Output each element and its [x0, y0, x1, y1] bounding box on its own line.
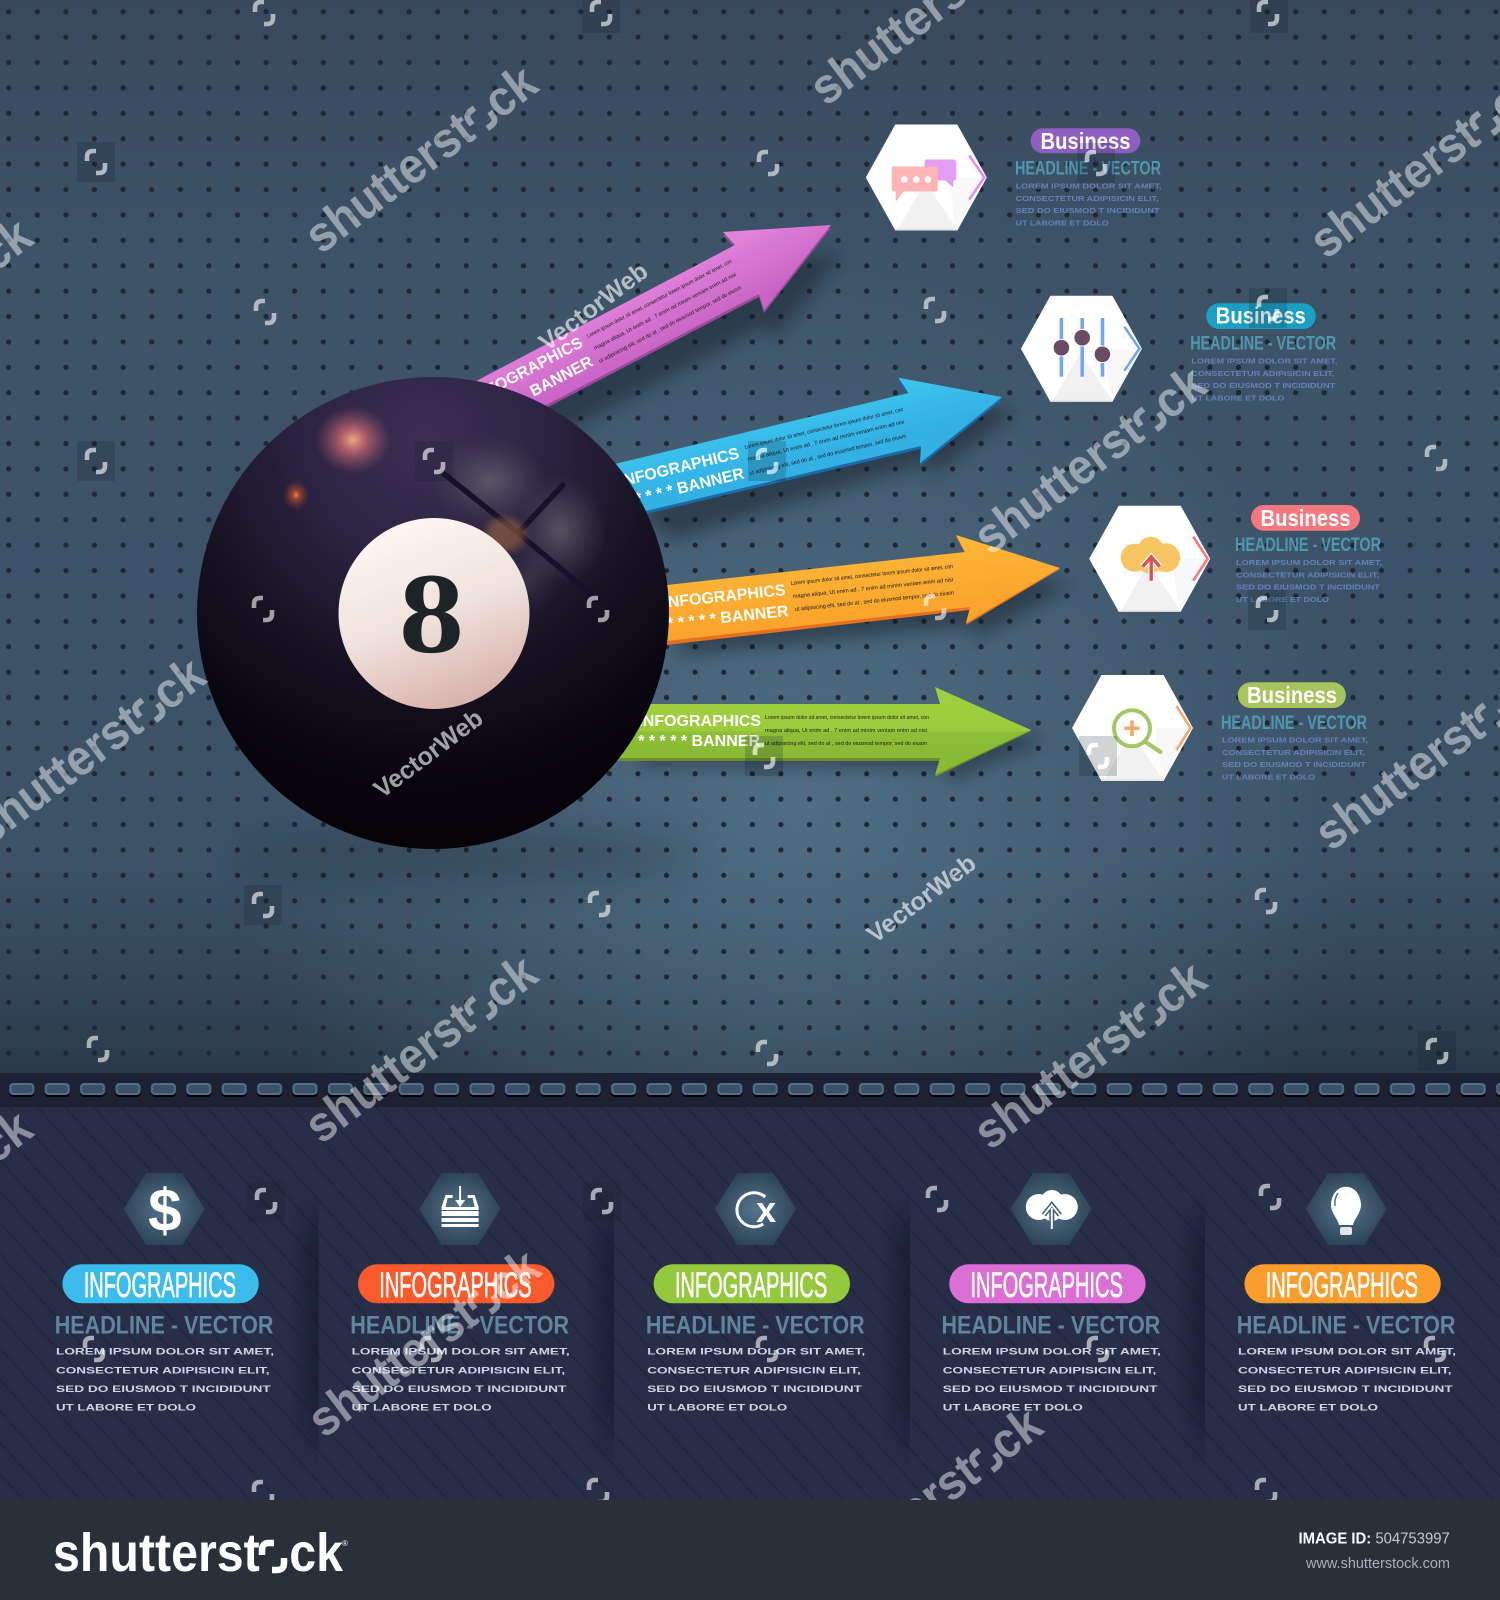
body text: UT LABORE ET DOLO	[943, 1403, 1083, 1413]
body text	[56, 1347, 274, 1413]
arrow: pink	[440, 225, 841, 450]
headline: HEADLINE - VECTOR	[55, 1312, 274, 1340]
arrow: green: * * * * * BANNER	[638, 733, 760, 750]
watermarks: VectorWeb	[369, 257, 981, 949]
arrow: orange: ut adipisicing elit, sed do at , sed do eiusmod tempor, sed do eiusm	[795, 590, 955, 613]
body text: UT LABORE ET DOLO	[352, 1403, 492, 1413]
pill	[1244, 1264, 1441, 1305]
hexagon icon: dollar: $	[148, 1177, 181, 1244]
text block 4: Business	[1247, 682, 1337, 708]
hexagon 3: cloud upload	[1089, 506, 1210, 612]
body text: UT LABORE ET DOLO	[1238, 1403, 1378, 1413]
eight ball	[197, 377, 669, 849]
body text: CONSECTETUR ADIPISICIN ELIT,	[352, 1365, 565, 1375]
text block 4	[1221, 682, 1368, 782]
image id: IMAGE ID: 504753997	[1298, 1530, 1450, 1548]
text block 3: SED DO EIUSMOD T INCIDIDUNT	[1236, 585, 1381, 592]
body text	[647, 1347, 865, 1413]
body text: LOREM IPSUM DOLOR SIT AMET,	[1238, 1347, 1456, 1357]
text block 3: CONSECTETUR ADIPISICIN ELIT,	[1236, 572, 1379, 579]
column 2: inbox	[350, 1173, 570, 1413]
website: www.shutterstock.com	[1305, 1556, 1450, 1572]
column 1: dollar	[55, 1173, 274, 1413]
arrow: blue: * * * * * BANNER	[624, 465, 746, 510]
text block 2: CONSECTETUR ADIPISICIN ELIT,	[1191, 371, 1334, 378]
body text: LOREM IPSUM DOLOR SIT AMET,	[352, 1347, 570, 1357]
text block 2: UT LABORE ET DOLO	[1191, 396, 1285, 402]
text block 3	[1235, 505, 1382, 604]
headline: HEADLINE - VECTOR	[350, 1312, 569, 1340]
arrow: green: Lorem ipsum dolor sit amet, consectetur lorem ipsum dolor sit amet, con	[765, 715, 929, 721]
text block 1: LOREM IPSUM DOLOR SIT AMET,	[1016, 184, 1162, 190]
hexagon icon: circle x: x	[756, 1189, 776, 1230]
icon: purple speech bubble	[922, 160, 956, 188]
arrow: green	[600, 687, 1046, 782]
watermarks: stock wordmarks: shutterstock	[294, 943, 547, 1154]
lower panel with diagonal stripes	[0, 1107, 1500, 1500]
body text: CONSECTETUR ADIPISICIN ELIT,	[56, 1365, 270, 1375]
arrow: green: ut adipisicing elit, sed do at , sed do eiusmod tempor, sed do eiusm	[765, 741, 927, 747]
arrow: green: INFOGRAPHICS	[638, 713, 761, 730]
arrow: blue: magna aliqua, Ut enim ad . 7 enim ad minim veniam enim ad nisi	[747, 420, 905, 463]
arrow: orange: magna aliqua, Ut enim ad . 7 enim ad minim veniam enim ad nisi	[793, 577, 953, 600]
arrow: blue: Lorem ipsum dolor sit amet, consectetur lorem ipsum dolor sit amet, con	[744, 407, 904, 451]
body text: SED DO EIUSMOD T INCIDIDUNT	[352, 1384, 567, 1394]
icon: magnifier	[1114, 710, 1160, 752]
text block 2	[1190, 302, 1337, 402]
body text: LOREM IPSUM DOLOR SIT AMET,	[943, 1347, 1161, 1357]
arrow: pink: INFOGRAPHICS	[469, 334, 586, 407]
pill: INFOGRAPHICS	[675, 1266, 827, 1305]
headline: HEADLINE - VECTOR	[646, 1312, 865, 1340]
icon: up arrow	[1143, 557, 1160, 581]
text block 4: SED DO EIUSMOD T INCIDIDUNT	[1222, 762, 1367, 769]
body text: CONSECTETUR ADIPISICIN ELIT,	[1238, 1365, 1452, 1375]
body text: SED DO EIUSMOD T INCIDIDUNT	[56, 1384, 271, 1394]
column 3: refresh x	[646, 1173, 865, 1413]
hexagon 4: magnifier	[1072, 675, 1193, 781]
body text: UT LABORE ET DOLO	[56, 1403, 196, 1413]
pill	[62, 1264, 259, 1305]
arrow: orange	[640, 535, 1070, 655]
headline: HEADLINE - VECTOR	[941, 1312, 1160, 1340]
icon: pink speech bubble	[892, 166, 938, 202]
ball flare: small	[283, 480, 309, 510]
hexagon icon: circle x	[715, 1173, 796, 1245]
arrow: orange: Lorem ipsum dolor sit amet, consectetur lorem ipsum dolor sit amet, con	[791, 564, 953, 587]
text block 1	[1015, 128, 1162, 228]
text block 2: SED DO EIUSMOD T INCIDIDUNT	[1191, 383, 1336, 390]
body text	[1238, 1347, 1456, 1413]
ball shadow	[240, 829, 700, 881]
icon: sliders	[1053, 318, 1111, 377]
arrow: orange: INFOGRAPHICS	[663, 582, 787, 612]
arrow: pink: BANNER	[527, 353, 596, 400]
text block 3: LOREM IPSUM DOLOR SIT AMET,	[1236, 560, 1382, 567]
pill	[654, 1264, 850, 1305]
icon: chevron	[1124, 327, 1139, 371]
pill: INFOGRAPHICS	[84, 1266, 236, 1305]
text block 2: Business	[1216, 302, 1306, 328]
watermarks: stock wordmarks: shutterstock	[294, 53, 547, 264]
body text: SED DO EIUSMOD T INCIDIDUNT	[943, 1384, 1158, 1394]
pill: INFOGRAPHICS	[379, 1266, 532, 1305]
text block 3: Business	[1260, 505, 1350, 531]
arrow: blue: INFOGRAPHICS	[618, 445, 741, 491]
ball flare: large	[315, 406, 391, 474]
arrow: blue	[590, 378, 1015, 540]
footer bar	[0, 1500, 1500, 1600]
hexagon icon: dollar	[124, 1173, 205, 1245]
body text: SED DO EIUSMOD T INCIDIDUNT	[647, 1384, 862, 1394]
text block 2: HEADLINE - VECTOR	[1190, 334, 1336, 354]
watermarks: VectorWeb: VectorWeb	[369, 704, 488, 804]
hexagon icon: bulb	[1306, 1173, 1387, 1245]
watermarks: stock wordmarks: shutterstock	[799, 1395, 1052, 1600]
pill: INFOGRAPHICS	[970, 1266, 1123, 1305]
footer logo: ®	[342, 1539, 348, 1548]
text block 1: Business	[1040, 128, 1130, 154]
arrow: blue: ut adipisicing elit, sed do at , sed do eiusmod tempor, sed do eiusm	[749, 433, 907, 477]
background: dotted upper panel	[0, 0, 1500, 1073]
ball window reflection panes	[432, 436, 606, 614]
footer logo: shutterstock	[53, 1523, 344, 1583]
arrow: green: magna aliqua, Ut enim ad . 7 enim ad minim veniam enim ad nisi	[765, 728, 927, 734]
watermarks: VectorWeb: VectorWeb	[862, 849, 981, 949]
body text	[352, 1347, 570, 1413]
watermarks: stock wordmarks: shutterstock	[963, 354, 1216, 565]
watermarks: stock wordmarks: shutterstock	[963, 949, 1216, 1160]
body text: UT LABORE ET DOLO	[647, 1403, 787, 1413]
pill	[358, 1264, 554, 1305]
text block 3: UT LABORE ET DOLO	[1236, 597, 1330, 604]
body text	[943, 1347, 1161, 1413]
icon: chevron	[969, 156, 984, 200]
icon: chevron	[1193, 537, 1208, 581]
body text: CONSECTETUR ADIPISICIN ELIT,	[647, 1365, 861, 1375]
text block 1: UT LABORE ET DOLO	[1016, 220, 1109, 228]
body text: SED DO EIUSMOD T INCIDIDUNT	[1238, 1384, 1453, 1394]
text block 4: LOREM IPSUM DOLOR SIT AMET,	[1222, 738, 1368, 744]
cue circle	[338, 518, 530, 709]
stitched band	[0, 1073, 1500, 1107]
arrow: orange: * * * * * BANNER	[666, 603, 790, 633]
hexagon icon: cloud	[1010, 1173, 1092, 1245]
watermarks: VectorWeb: VectorWeb	[534, 257, 653, 357]
text block 4: UT LABORE ET DOLO	[1222, 774, 1316, 782]
hexagon 1: chat	[866, 124, 987, 230]
body text: LOREM IPSUM DOLOR SIT AMET,	[647, 1347, 865, 1357]
hexagon 2: sliders	[1021, 296, 1142, 402]
hexagon icon: inbox	[419, 1173, 500, 1245]
body text: CONSECTETUR ADIPISICIN ELIT,	[943, 1365, 1156, 1375]
column 5: bulb	[1237, 1173, 1456, 1413]
arrow: pink: ut adipisicing elit, sed do at , sed do eiusmod tempor, sed do eiusm	[598, 285, 743, 365]
text block 3: HEADLINE - VECTOR	[1235, 535, 1381, 556]
headline: HEADLINE - VECTOR	[1237, 1312, 1456, 1340]
body text: LOREM IPSUM DOLOR SIT AMET,	[56, 1347, 274, 1357]
arrow: pink: Lorem ipsum dolor sit amet, consectetur lorem ipsum dolor sit amet, con	[586, 259, 733, 340]
icon: chevron	[1176, 706, 1190, 750]
text block 4: CONSECTETUR ADIPISICIN ELIT,	[1222, 750, 1365, 757]
column 4: cloud	[942, 1173, 1161, 1413]
text block 1: SED DO EIUSMOD T INCIDIDUNT	[1016, 208, 1161, 215]
numeral 8: 8	[399, 550, 464, 677]
text block 2: LOREM IPSUM DOLOR SIT AMET,	[1191, 358, 1337, 366]
text block 4: HEADLINE - VECTOR	[1221, 713, 1367, 734]
watermarks: stock wordmarks: shutterstock	[297, 1237, 550, 1448]
icon: cloud	[1121, 537, 1180, 574]
arrow: pink: magna aliqua, Ut enim ad . 7 enim ad minim veniam enim ad nisi	[593, 272, 738, 352]
text block 1: HEADLINE - VECTOR	[1015, 158, 1161, 180]
pill	[949, 1264, 1146, 1305]
text block 1: CONSECTETUR ADIPISICIN ELIT,	[1016, 196, 1159, 203]
